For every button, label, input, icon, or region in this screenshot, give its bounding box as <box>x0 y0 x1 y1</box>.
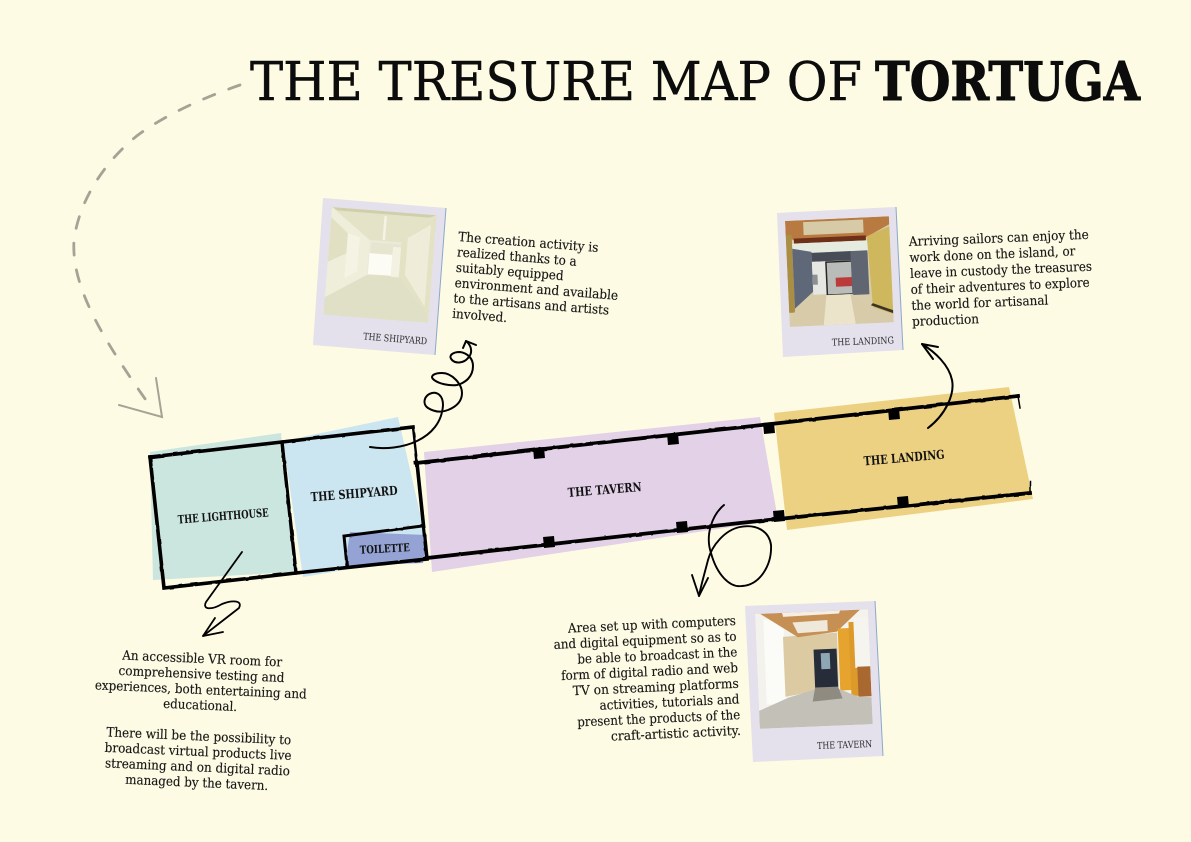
title: THE TRESURE MAP OF <box>250 50 862 113</box>
text: lighthouse description: managed by the tavern. <box>125 773 269 794</box>
text: shipyard description <box>452 230 623 335</box>
room fill: toilette <box>345 532 427 566</box>
arrow: lighthouse zigzag to text <box>203 552 242 636</box>
polaroid: the landing <box>777 207 903 357</box>
photo: landing entrance <box>785 216 894 327</box>
text: lighthouse description: educational. <box>163 697 237 715</box>
text: lighthouse description: An accessible VR room for <box>121 648 283 671</box>
dashed arrow: title to lighthouse <box>74 85 240 417</box>
text: lighthouse description: broadcast virtual products live <box>104 741 292 764</box>
text: tavern description: form of digital radio and web <box>561 661 738 684</box>
arrow: tavern loop to text <box>692 505 771 596</box>
photo: shipyard corridor <box>323 207 437 323</box>
text: shipyard description: The creation activity is <box>458 230 599 256</box>
room fill: landing <box>774 387 1033 530</box>
text: landing description: Arriving sailors can enjoy the <box>908 228 1089 250</box>
text: shipyard description: to the artisans and artists <box>453 291 610 319</box>
photo: tavern hall <box>755 609 873 729</box>
text: lighthouse description <box>91 647 308 796</box>
text: tavern description <box>553 614 741 747</box>
text: shipyard description: realized thanks to a <box>456 245 578 270</box>
polaroid: the shipyard <box>313 198 446 355</box>
text: landing description: the world for artisanal <box>911 293 1049 314</box>
text: tavern description: present the products of the <box>577 708 741 730</box>
room label: the landing: THE LANDING <box>863 447 945 469</box>
room label: toilette: TOILETTE <box>360 541 410 557</box>
room fill: shipyard <box>283 417 426 577</box>
text: tavern description: TV on streaming platforms <box>573 677 739 699</box>
polaroid: the tavern <box>745 601 883 762</box>
text: tavern description: Area set up with computers <box>567 614 736 637</box>
room label: the shipyard: THE SHIPYARD <box>310 483 398 504</box>
room fill: tavern <box>424 417 778 572</box>
text: landing description <box>908 228 1094 330</box>
text: lighthouse description: comprehensive testing and <box>118 664 285 686</box>
structural columns <box>533 408 909 548</box>
text: landing description: leave in custody the treasures <box>910 260 1092 282</box>
arrow: landing to photo <box>922 344 953 428</box>
caption: the landing: THE LANDING <box>832 335 894 349</box>
floor plan <box>150 387 1033 588</box>
room label: the tavern: THE TAVERN <box>567 479 642 500</box>
text: tavern description: craft-artistic activity. <box>611 724 741 745</box>
text: shipyard description: suitably equipped <box>455 261 564 284</box>
arrow: shipyard spiral to photo <box>370 341 476 448</box>
text: lighthouse description: experiences, both entertaining and <box>95 678 307 703</box>
text: shipyard description: environment and available <box>454 276 619 304</box>
walls <box>150 396 1030 588</box>
text: landing description: work done on the island, or <box>909 244 1076 266</box>
caption: the tavern: THE TAVERN <box>817 739 872 752</box>
text: lighthouse description: streaming and on digital radio <box>105 756 290 779</box>
text: landing description: of their adventures to explore <box>910 276 1090 298</box>
text: tavern description: be able to broadcast in the <box>577 645 738 668</box>
caption: the shipyard: THE SHIPYARD <box>363 332 428 348</box>
text: landing description: production <box>912 312 980 330</box>
title: TORTUGA <box>875 50 1141 113</box>
room label: the lighthouse: THE LIGHTHOUSE <box>177 505 269 527</box>
text: shipyard description: involved. <box>452 307 508 326</box>
room fill: lighthouse <box>150 433 294 580</box>
text: lighthouse description: There will be the possibility to <box>106 725 292 748</box>
text: tavern description: and digital equipment so as to <box>553 630 737 653</box>
text: tavern description: activities, tutorials and <box>599 692 740 714</box>
infographic canvas <box>72 60 1141 790</box>
